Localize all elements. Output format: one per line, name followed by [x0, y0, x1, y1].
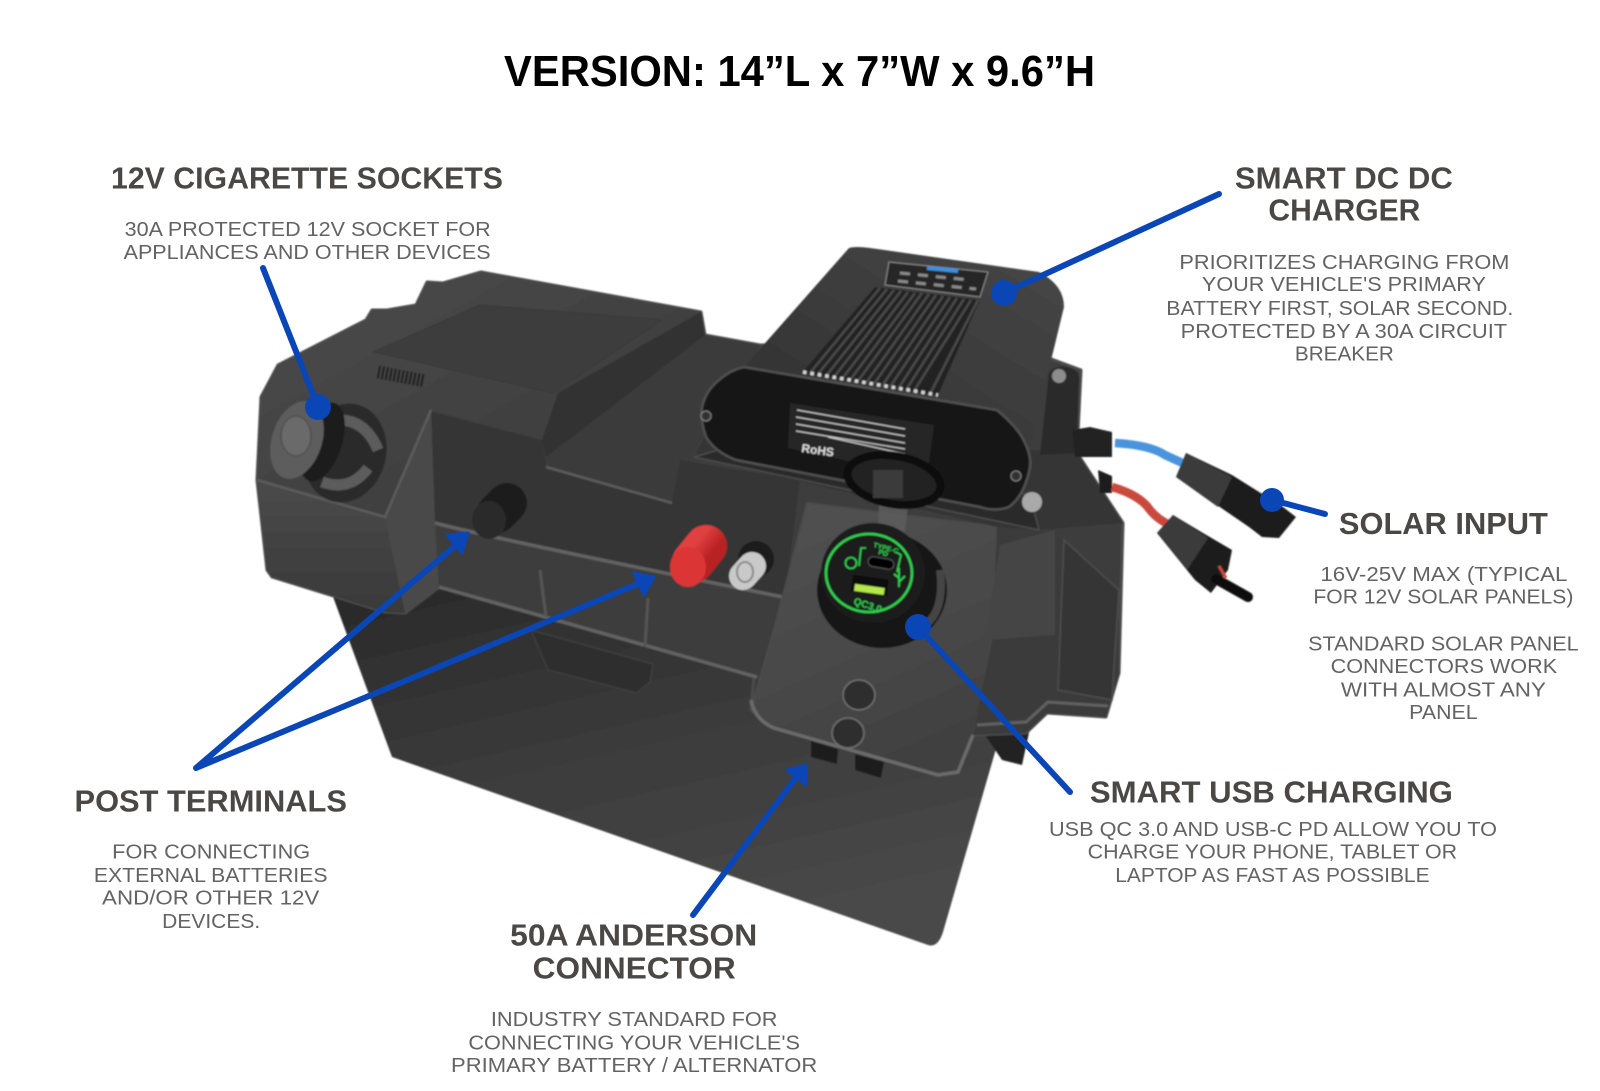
callout: solar input [1260, 488, 1579, 724]
ribbed side [973, 527, 1119, 735]
usb-c bracket [859, 548, 901, 572]
callout: dc dc charger [991, 160, 1513, 366]
anchor dot [905, 614, 931, 640]
type-c label: TYPE-C [872, 542, 899, 556]
left block front wall [257, 480, 405, 613]
usb-a port [851, 575, 889, 596]
arrowhead: black terminal [447, 533, 468, 553]
description: AND/OR OTHER 12V [102, 887, 320, 910]
description: PANEL [1409, 701, 1478, 724]
description: EXTERNAL BATTERIES [94, 864, 328, 887]
lid silhouette [257, 272, 1123, 775]
description: STANDARD SOLAR PANEL [1308, 633, 1579, 656]
callout: post terminals [74, 533, 654, 933]
usb weather cap [844, 448, 944, 532]
lower battery box [325, 560, 1000, 945]
description: CONNECTORS WORK [1331, 655, 1557, 678]
spec label [788, 403, 934, 478]
vent slots [378, 372, 425, 381]
pd label: PD [877, 549, 889, 558]
anchor dot [305, 394, 331, 420]
qc label: QC3.0 [852, 596, 883, 616]
mounting bolt [1022, 492, 1042, 512]
fin tips [803, 372, 938, 395]
leader line [693, 775, 798, 915]
description: DEVICES. [162, 910, 260, 933]
anchor dot [1260, 488, 1284, 512]
usb icon [894, 568, 905, 587]
description: PRIMARY BATTERY / ALTERNATOR [451, 1054, 817, 1077]
front ledge [435, 523, 783, 677]
heading [510, 918, 757, 986]
description: PROTECTED BY A 30A CIRCUIT [1181, 320, 1508, 343]
description: CONNECTING YOUR VEHICLE'S [468, 1032, 800, 1055]
anderson connectors [811, 741, 884, 778]
description: LAPTOP AS FAST AS POSSIBLE [1115, 864, 1430, 887]
top plate surface [257, 272, 701, 517]
callout: cigarette sockets [111, 160, 503, 420]
solar cable: negative red [1098, 470, 1248, 597]
solar cable: positive blue [1072, 427, 1296, 538]
hasp slots [540, 570, 648, 647]
socket recess [292, 394, 398, 512]
heading: CONNECTOR [533, 950, 736, 986]
description: INDUSTRY STANDARD FOR [491, 1008, 778, 1031]
illustration: battery box with charger [257, 247, 1296, 945]
usb-c port [867, 556, 895, 570]
top fold highlight [257, 410, 672, 517]
arrowhead: red terminal [634, 573, 654, 595]
description [451, 1008, 817, 1077]
side of plate [542, 312, 705, 457]
status panel [885, 262, 988, 297]
sloped valley [546, 335, 760, 503]
description [124, 218, 491, 264]
usb block lower lip [751, 700, 973, 775]
screws [701, 411, 1021, 481]
hasp clip [531, 630, 653, 693]
flip cap [261, 394, 333, 486]
description: 30A PROTECTED 12V SOCKET FOR [125, 218, 491, 241]
heading: 50A ANDERSON [510, 918, 757, 952]
heading: 12V CIGARETTE SOCKETS [111, 160, 503, 196]
clear terminal cap [737, 541, 774, 582]
usb charging socket [817, 523, 947, 648]
description: 16V-25V MAX (TYPICAL [1320, 563, 1567, 586]
rear bolt bracket [1040, 366, 1080, 455]
description: BATTERY FIRST, SOLAR SECOND. [1166, 297, 1513, 320]
description: YOUR VEHICLE'S PRIMARY [1202, 273, 1486, 296]
leader line [918, 627, 1070, 792]
red post terminal [670, 546, 706, 587]
description: APPLIANCES AND OTHER DEVICES [124, 241, 491, 264]
callout: anderson connector [451, 765, 817, 1077]
charger front face [702, 367, 1030, 510]
round plugs [832, 680, 875, 748]
socket recess [817, 532, 947, 648]
cooling fins [803, 287, 980, 395]
fan icon [846, 558, 856, 568]
socket collar [290, 397, 354, 487]
mounting plate under charger [694, 425, 1123, 530]
forked leader lines [196, 540, 640, 768]
heading: SOLAR INPUT [1339, 506, 1548, 541]
callout: smart usb charging [905, 614, 1497, 887]
anchor dot [991, 280, 1017, 306]
left block chamfer [385, 410, 439, 613]
heading: SMART USB CHARGING [1090, 774, 1453, 810]
cap centre [281, 416, 311, 456]
heading [1235, 160, 1453, 228]
leader line [263, 268, 318, 407]
description: BREAKER [1295, 343, 1394, 366]
black post terminal [472, 501, 507, 539]
socket disk [821, 523, 925, 623]
charger top [744, 247, 1064, 447]
arrowhead [787, 765, 806, 785]
description: USB QC 3.0 AND USB-C PD ALLOW YOU TO [1049, 818, 1497, 841]
recessed centre wall [431, 412, 800, 597]
barrel highlight [322, 420, 378, 485]
heading: SMART DC DC [1235, 160, 1453, 196]
dc dc charger [701, 247, 1064, 510]
description [1166, 251, 1513, 366]
leader line [1272, 500, 1325, 514]
description: FOR 12V SOLAR PANELS) [1313, 586, 1573, 609]
usb block front [751, 503, 997, 775]
heading: POST TERMINALS [74, 784, 347, 818]
title: VERSION: 14”L x 7”W x 9.6”H [504, 47, 1095, 96]
rohs mark: RoHS [801, 441, 835, 460]
embossed label area [374, 305, 662, 393]
heading: CHARGER [1268, 192, 1420, 228]
rear bracket under lid [985, 728, 1030, 765]
description: PRIORITIZES CHARGING FROM [1179, 251, 1509, 274]
description [1308, 563, 1579, 724]
description [1049, 818, 1497, 887]
ledge highlights [435, 523, 783, 677]
rib panels [985, 530, 1055, 640]
description [94, 841, 328, 933]
description: FOR CONNECTING [112, 841, 310, 864]
description: WITH ALMOST ANY [1341, 678, 1546, 701]
leader line [1004, 194, 1219, 293]
green ring [826, 534, 912, 612]
description: CHARGE YOUR PHONE, TABLET OR [1088, 841, 1457, 864]
cigarette socket [261, 394, 398, 512]
